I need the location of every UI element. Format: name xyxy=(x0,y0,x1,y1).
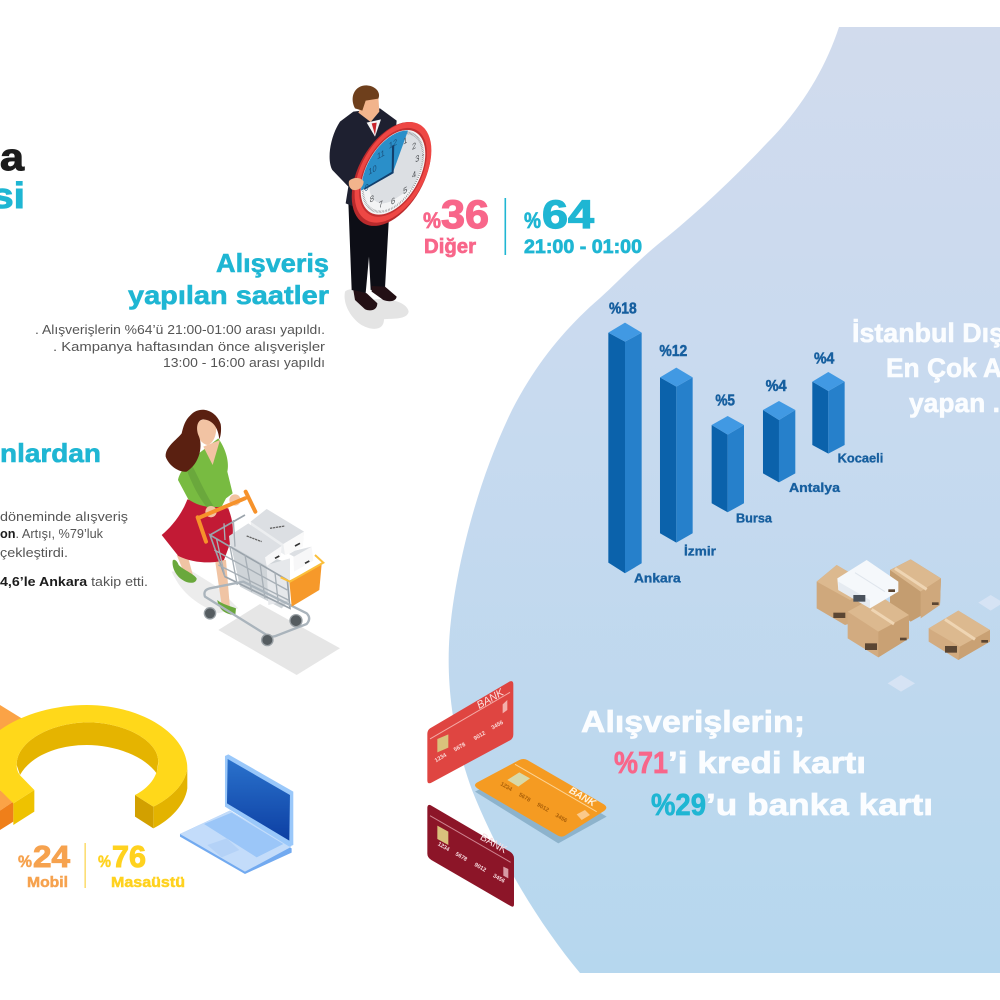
faint floor tiles xyxy=(888,595,1000,692)
dark red card: BANK xyxy=(478,831,509,856)
stat: mobile 24 percent xyxy=(18,839,71,891)
bar city labels: Kocaeli xyxy=(838,451,883,466)
stat: desktop 76 percent xyxy=(98,839,185,891)
illustration: cardboard boxes xyxy=(817,559,1000,692)
bar value labels: %4 xyxy=(814,350,835,367)
stat: other hours 36 percent xyxy=(423,193,489,258)
man legs and shadow xyxy=(345,202,409,329)
orange debit card: BANK xyxy=(567,785,598,810)
bar: Bursa xyxy=(712,416,744,512)
red credit card: 5678 xyxy=(453,742,467,753)
lower boxes in cart xyxy=(231,544,290,608)
red credit card: 9012 xyxy=(473,731,487,742)
wall clock: 2 xyxy=(412,140,416,152)
text block: card payment share xyxy=(581,704,933,822)
dark red card xyxy=(427,805,514,907)
stat: evening hours 64 percent xyxy=(524,193,642,258)
wall clock: 10 xyxy=(368,162,377,177)
clock blue sector xyxy=(361,126,408,191)
donut chart: device share xyxy=(0,705,187,830)
stat: evening hours 64 percent: 21:00 - 01:00 xyxy=(524,237,642,258)
bar value labels: %12 xyxy=(659,343,687,360)
stat: other hours 36 percent: 36 xyxy=(441,193,489,237)
stat: mobile 24 percent: Mobil xyxy=(27,874,68,891)
background blue wave panel xyxy=(449,27,1000,973)
bar chart: cities outside Istanbul xyxy=(608,300,883,586)
wall clock: 3 xyxy=(415,152,420,165)
cart basket xyxy=(210,515,290,608)
wall clock: 9 xyxy=(365,181,369,194)
stat: evening hours 64 percent: % xyxy=(524,208,541,233)
bar value labels: %5 xyxy=(715,393,735,410)
bar value labels: %4 xyxy=(766,378,787,395)
heading fragment: customers: nlardan xyxy=(0,438,101,468)
bar city labels: İzmir xyxy=(684,544,716,559)
wall clock: 7 xyxy=(379,198,383,210)
text block: campaign period: döneminde alışveriş xyxy=(0,509,129,524)
text block: card payment share: %29 xyxy=(651,787,706,822)
text block: shopping hours: . Alışverişlerin %64’ü 21:00-01:00 arası yapıldı. xyxy=(35,322,325,337)
dark red card: 3456 xyxy=(492,873,506,885)
icon: laptop xyxy=(180,754,293,874)
text block: campaign period: çekleştirdi. xyxy=(0,545,68,560)
title fragment: a xyxy=(0,137,25,179)
wall clock: 6 xyxy=(391,195,395,207)
dark red card: 1234 xyxy=(436,842,451,853)
red credit card: BANK xyxy=(475,686,507,712)
heading: shopping hours: yapılan saatler xyxy=(128,280,329,310)
heading: top cities outside Istanbul xyxy=(852,318,1000,418)
bar: Ankara xyxy=(608,323,642,573)
wall clock: 1 xyxy=(403,134,407,147)
text block: card payment share: %71 xyxy=(614,745,668,780)
shopping boxes xyxy=(251,509,304,555)
bar value labels: %18 xyxy=(609,300,637,317)
illustration: credit cards xyxy=(427,681,607,907)
red credit card: 1234 xyxy=(434,752,449,764)
bar city labels xyxy=(634,451,883,586)
red credit card: 3456 xyxy=(491,720,505,731)
orange debit card: 1234 xyxy=(499,782,514,793)
red credit card xyxy=(427,681,513,783)
stat: desktop 76 percent: 76 xyxy=(112,839,146,874)
stat: desktop 76 percent: % xyxy=(98,852,111,871)
bar city labels: Ankara xyxy=(634,571,681,586)
wall clock: 5 xyxy=(403,184,407,196)
stat: desktop 76 percent: Masaüstü xyxy=(111,874,185,891)
heading: top cities outside Istanbul: yapan . xyxy=(909,388,1000,418)
stat: evening hours 64 percent: 64 xyxy=(542,193,595,237)
stat: mobile 24 percent: % xyxy=(18,852,32,871)
orange debit card xyxy=(475,759,607,843)
man torso and clock xyxy=(330,85,431,243)
cart handle xyxy=(198,492,255,542)
text block: card payment share: ’u banka kartı xyxy=(706,787,933,822)
bar city labels: Bursa xyxy=(736,510,773,525)
text block: campaign period: 4,6’le Ankara takip etti. xyxy=(0,574,148,589)
dark red card: 9012 xyxy=(473,862,487,874)
text block: shopping hours: 13:00 - 16:00 arası yapıldı xyxy=(163,355,325,370)
heading: shopping hours: Alışveriş xyxy=(216,248,329,278)
text block: shopping hours: . Kampanya haftasından önce alışverişler xyxy=(53,339,326,354)
wall clock: 4 xyxy=(412,168,416,181)
text block: card payment share: Alışverişlerin; xyxy=(581,704,805,739)
bar: Kocaeli xyxy=(812,372,845,454)
heading: shopping hours xyxy=(128,248,329,310)
text block: card payment share: ’i kredi kartı xyxy=(668,745,866,780)
text block: shopping hours xyxy=(35,322,326,370)
stat: mobile 24 percent: 24 xyxy=(33,839,71,874)
illustration: man holding clock xyxy=(330,85,431,329)
bar: Antalya xyxy=(763,401,795,482)
stat: other hours 36 percent: % xyxy=(423,208,441,233)
illustration: woman with shopping cart xyxy=(162,410,340,675)
wall clock: 8 xyxy=(370,192,374,205)
bar value labels xyxy=(609,300,835,410)
text block: campaign period xyxy=(0,509,148,589)
orange debit card: 5678 xyxy=(517,792,531,804)
orange debit card: 3456 xyxy=(554,813,568,824)
orange cart panel xyxy=(289,564,322,607)
text block: campaign period: on. Artışı, %79’luk xyxy=(0,526,103,541)
bar: Izmir xyxy=(660,368,693,543)
orange debit card: 9012 xyxy=(536,802,550,814)
dark red card: 5678 xyxy=(454,852,468,863)
wall clock: 11 xyxy=(377,147,385,162)
title fragment xyxy=(0,137,25,216)
wall clock: 12 xyxy=(389,136,397,151)
cart wheels xyxy=(204,608,302,646)
bar city labels: Antalya xyxy=(789,480,841,495)
wall clock xyxy=(352,104,431,243)
stat: other hours 36 percent: Diğer xyxy=(424,236,476,258)
